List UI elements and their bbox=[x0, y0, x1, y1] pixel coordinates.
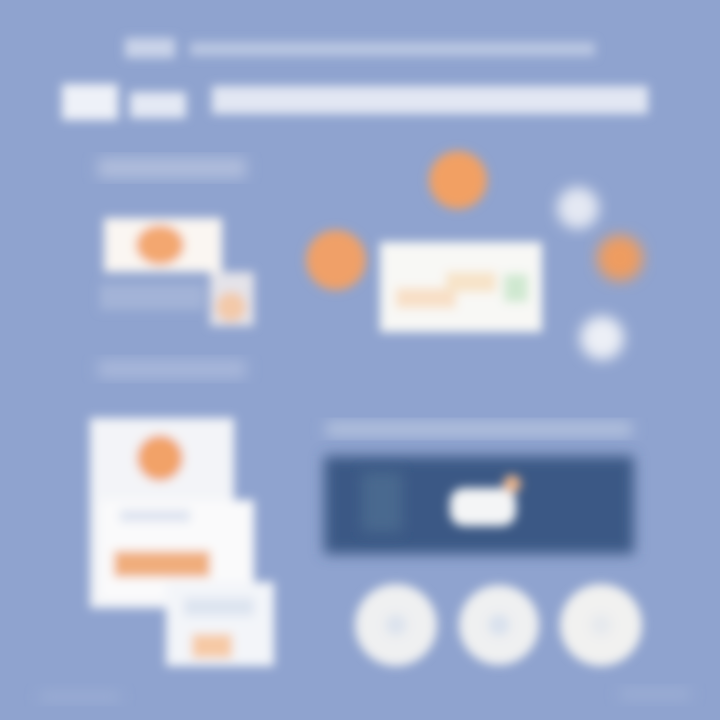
icon: bottom right white circle bbox=[580, 316, 624, 360]
icon: first round badge bbox=[355, 584, 437, 666]
heading: lower left bbox=[98, 360, 246, 378]
panel: upper left card bbox=[100, 218, 254, 326]
heading: dark panel bbox=[326, 422, 632, 436]
icon: top right white circle bbox=[557, 187, 599, 229]
panel: dark banner bbox=[324, 456, 634, 554]
heading: upper left bbox=[98, 158, 246, 178]
panel: lower left stacked cards bbox=[90, 418, 274, 666]
icon: top orange circle bbox=[429, 151, 487, 209]
banner detail bbox=[362, 472, 402, 532]
icon: third round badge bbox=[560, 584, 642, 666]
chart card bbox=[380, 242, 542, 332]
title bbox=[62, 38, 648, 120]
icon: second round badge bbox=[459, 585, 539, 665]
icon: banner cloud bbox=[450, 475, 521, 526]
footer bbox=[40, 688, 690, 702]
icon: left orange circle bbox=[306, 230, 366, 290]
icon: right orange circle bbox=[597, 235, 643, 281]
